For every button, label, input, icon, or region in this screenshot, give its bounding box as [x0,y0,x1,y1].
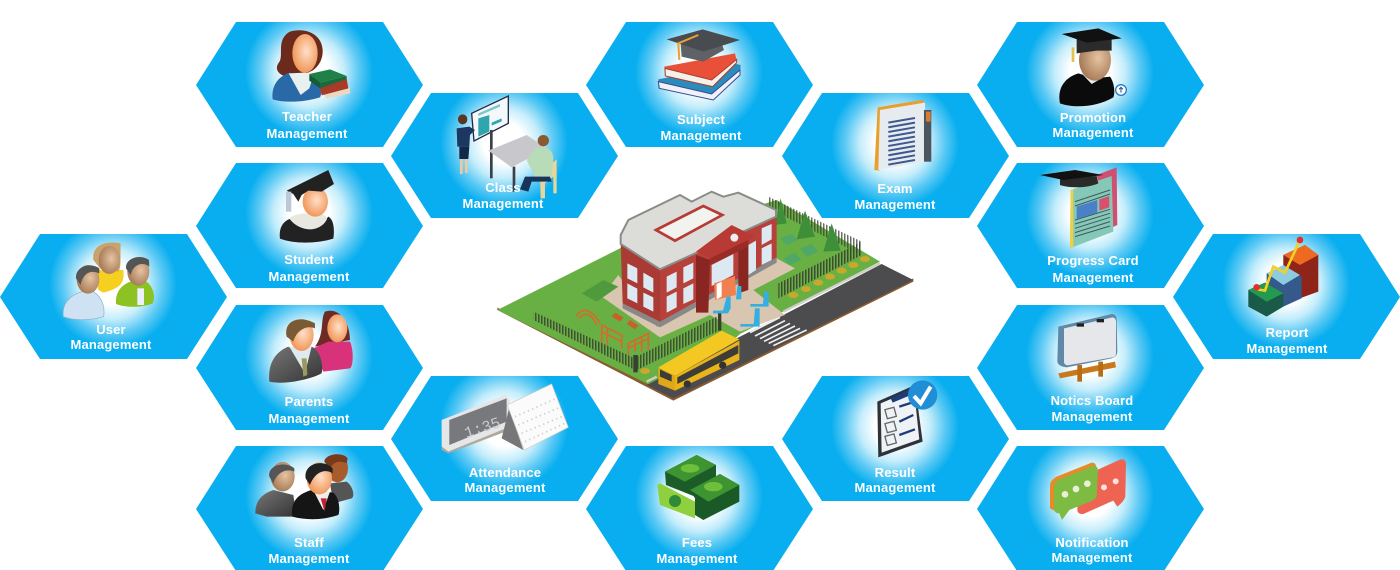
label: promotion: Promotion [1060,110,1126,125]
icon: parents [269,311,353,383]
panel: parents management [196,305,423,430]
panel: student management [196,163,423,288]
label: notification: Notification [1055,535,1129,550]
panel: result management [782,376,1009,501]
label: parents: Parents [285,394,333,409]
picnic tables [780,234,818,265]
hexagon: report [1173,234,1400,359]
panel: class management [391,93,618,218]
hexagon: teacher [196,22,423,147]
label: subject: Subject [677,112,726,127]
icon: books and graduation cap [658,29,741,100]
icon: three staff members [255,454,353,519]
playground [576,310,648,355]
label: parents: Management [269,411,350,426]
panel: exam management [782,93,1009,218]
label: notice board: Management [1052,409,1133,424]
icon: checklist clipboard with tick [877,380,937,457]
label: user: Management [71,337,152,352]
front left fence [533,312,721,372]
trees [775,198,841,252]
icon: chat bubbles [1050,459,1126,520]
hexagon: class [391,93,618,218]
hexagon: attendance [391,376,618,501]
icon: clock and calendar [442,384,568,453]
label: attendance: Management [465,480,546,495]
hexagon: subject [586,22,813,147]
icon: notice board [1057,314,1117,382]
label: subject: Management [661,128,742,143]
label: user: User [96,322,126,337]
label: student: Student [284,252,334,267]
label: exam: Exam [877,181,913,196]
back fence [768,197,862,255]
icon: three users [63,242,154,320]
panel: user management [0,234,227,359]
yellow bushes [640,256,870,374]
panel: teacher management [196,22,423,147]
skylight [656,206,722,241]
panel: notice board management [977,305,1204,430]
roof [621,192,776,269]
label: attendance: Attendance [469,465,541,480]
paving [602,258,795,337]
building side wall [660,213,777,322]
crosswalk [750,317,807,346]
icon: 3D bar chart [1248,237,1318,317]
panel: subject management [586,22,813,147]
label: class: Class [485,180,521,195]
label: fees: Fees [682,535,712,550]
panel: staff management [196,446,423,570]
label: fees: Management [657,551,738,566]
building front wall [621,243,660,322]
hexagon: notice board [977,305,1204,430]
illustration: school building campus [497,192,913,401]
building base [623,257,777,327]
label: promotion: Management [1053,125,1134,140]
icon: progress card with cap [1040,167,1117,248]
panel: attendance management [391,376,618,501]
panel: progress card management [977,163,1204,288]
lawn [497,200,880,397]
hexagon: result [782,376,1009,501]
label: staff: Management [269,551,350,566]
icon: stacks of banknotes [657,455,739,520]
icon: teacher at whiteboard with student [457,96,557,198]
icon: student with cap [280,170,334,243]
label: notification: Management [1052,550,1133,565]
icon: teacher with books [272,30,350,102]
label: report: Management [1247,341,1328,356]
label: notice board: Notics Board [1051,393,1133,408]
hexagon: user [0,234,227,359]
label: progress card: Management [1053,270,1134,285]
label: report: Report [1266,325,1309,340]
portico [696,225,755,313]
label: student: Management [269,269,350,284]
hexagon: notification [977,446,1204,570]
people [713,286,769,327]
ground edge [497,278,913,401]
door [714,276,736,300]
icon: graduate with cap [1059,28,1126,106]
front right fence [778,242,862,298]
hexagon: progress card [977,163,1204,288]
panel: report management [1173,234,1400,359]
sidewalk edge [647,263,880,382]
hexagon: staff [196,446,423,570]
hexagon: exam [782,93,1009,218]
lawn patch [582,280,618,302]
icon: exam paper and pencil [874,100,931,171]
school bus [658,331,739,391]
label: staff: Staff [294,535,324,550]
benches [612,313,623,322]
hexagon: student [196,163,423,288]
label: teacher: Teacher [282,109,332,124]
icon: clock and calendar: 1:35 [462,414,503,443]
panel: notification management [977,446,1204,570]
hexagon: parents [196,305,423,430]
label: exam: Management [855,197,936,212]
hexagon: promotion [977,22,1204,147]
label: result: Result [875,465,916,480]
label: progress card: Progress Card [1047,253,1139,268]
road [647,264,913,398]
label: result: Management [855,480,936,495]
panel: promotion management [977,22,1204,147]
label: class: Management [463,196,544,211]
hexagon: fees [586,446,813,570]
windows [627,224,772,313]
panel: fees management [586,446,813,570]
label: teacher: Management [267,126,348,141]
